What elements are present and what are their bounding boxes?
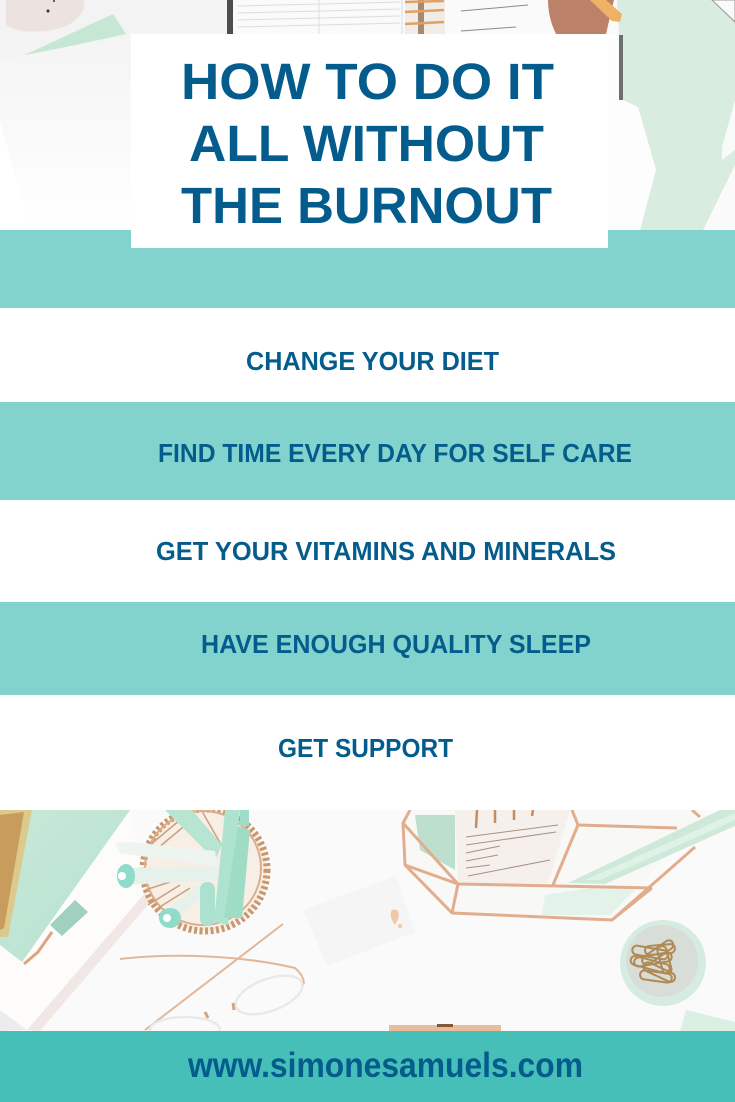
hand [548,0,614,34]
spiral rings [405,0,445,34]
wire basket [143,809,267,931]
mint binder [0,810,130,962]
white book under binder [0,810,145,1030]
notepad writing [466,825,558,876]
notepad spirals [476,810,533,828]
gold pen [590,0,622,22]
item 5: GET SUPPORT [278,733,453,763]
top desk photo [0,0,735,230]
item 2: FIND TIME EVERY DAY FOR SELF CARE [158,438,632,468]
item 3: GET YOUR VITAMINS AND MINERALS [156,536,616,566]
title [181,53,554,234]
title: HOW TO DO IT [181,53,554,110]
glasses [120,923,305,1031]
gold pen bottom [389,1025,501,1031]
title: THE BURNOUT [181,177,552,234]
planner [233,0,560,34]
bowl of paperclips [620,920,706,1006]
keyboard corner [712,0,735,22]
list rows [0,308,735,810]
item 4: HAVE ENOUGH QUALITY SLEEP [201,629,591,659]
mint sliver [0,105,14,170]
mint paper bottom right [680,1010,735,1031]
title panel [131,34,608,248]
item 1: CHANGE YOUR DIET [246,346,499,376]
footer band [0,1031,735,1102]
website url: www.simonesamuels.com [187,1046,583,1085]
top teal band [0,230,735,308]
planner handwriting [461,5,528,31]
title: ALL WITHOUT [189,115,544,172]
cloth and dark strip [624,100,656,230]
green book [20,14,126,57]
left object [6,0,84,32]
pens [115,810,250,928]
mint folder right [617,0,735,230]
glass box [403,810,735,920]
note card [303,876,415,966]
tassel [50,900,88,936]
bottom desk photo [0,809,735,1043]
white notebook [0,34,132,230]
